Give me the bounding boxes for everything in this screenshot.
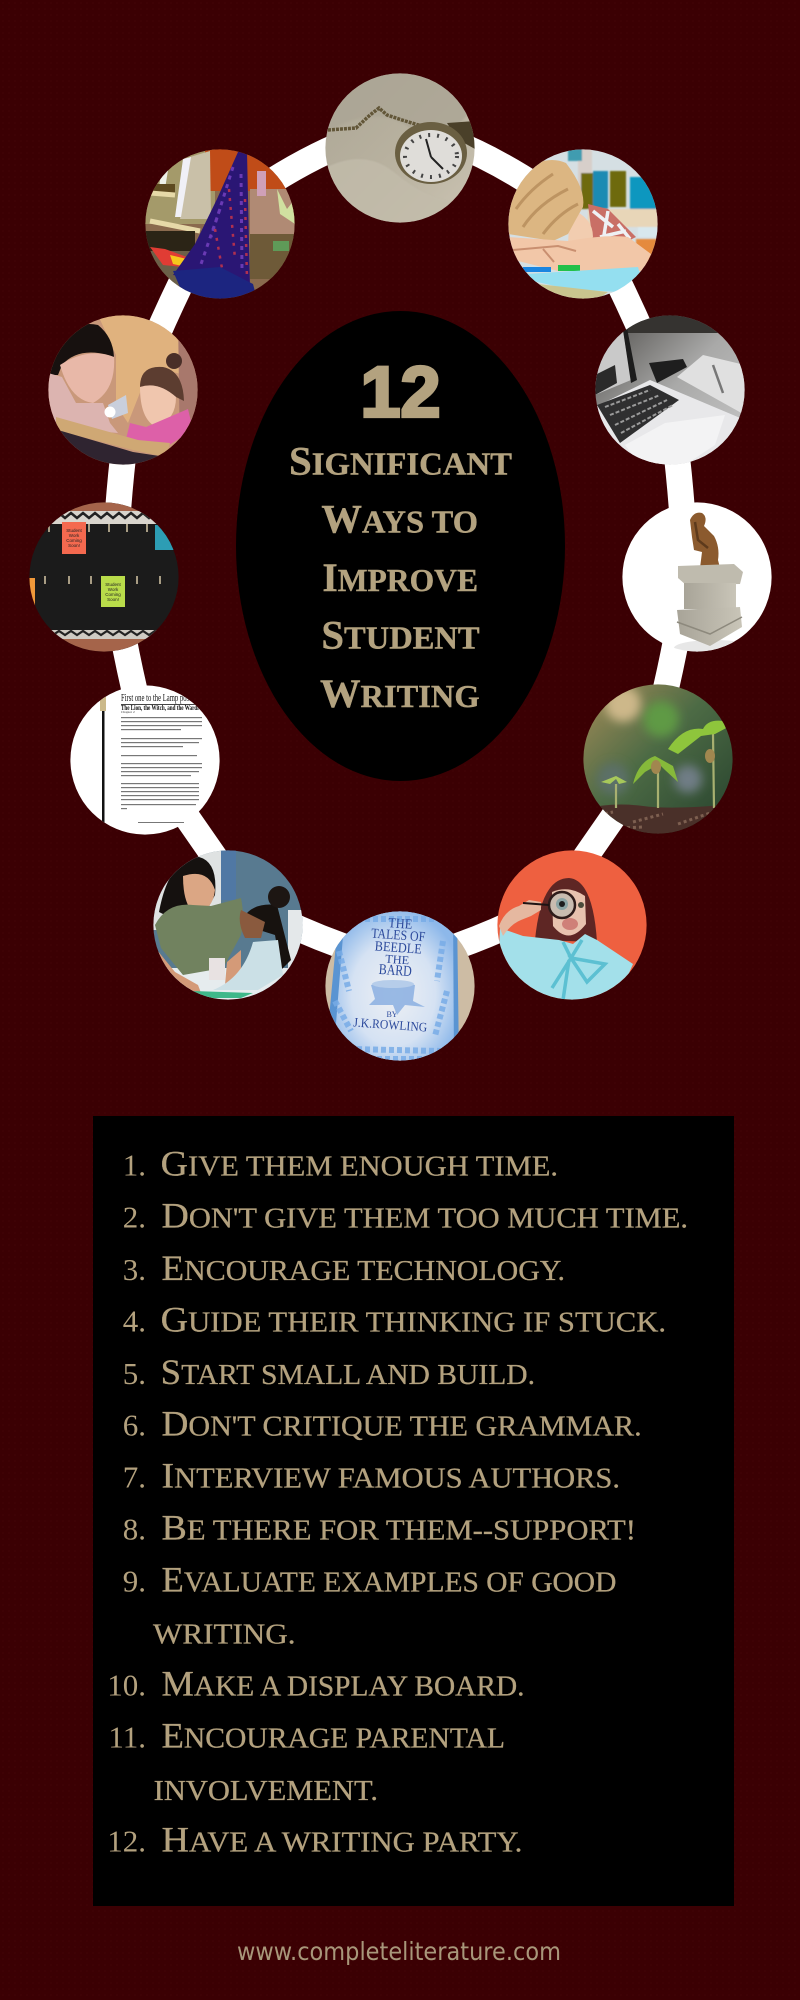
tip 9: EVALUATE EXAMPLES OF GOOD	[162, 1560, 616, 1600]
note: orange: Soon!	[68, 543, 80, 548]
tip 11: 11.	[108, 1720, 146, 1755]
photo: classroom display board	[29, 502, 179, 652]
note: green: Coming	[105, 592, 121, 597]
tip 4: GUIDE THEIR THINKING IF STUCK.	[161, 1300, 666, 1340]
tip 3: 3.	[123, 1252, 146, 1287]
tip 9: WRITING.	[153, 1619, 296, 1651]
tip 11: INVOLVEMENT.	[154, 1775, 378, 1807]
photo: The Tales of Beedle the Bard book cover	[325, 911, 475, 1061]
note: green: Student	[105, 582, 122, 587]
photo: The Tales of Beedle the Bard book cover: BEEDLE	[374, 939, 422, 958]
photo: The Tales of Beedle the Bard book cover: BY	[386, 1010, 398, 1019]
note: green	[101, 576, 125, 607]
note: green: Soon!	[107, 597, 119, 602]
title line: Improve: IMPROVE	[322, 555, 478, 600]
tip 7: 7.	[123, 1460, 146, 1495]
tip 11	[108, 1716, 505, 1807]
tip 9: 9.	[123, 1564, 146, 1599]
title oval	[236, 311, 565, 781]
tip 6: DON'T CRITIQUE THE GRAMMAR.	[162, 1404, 642, 1444]
note: blue	[155, 525, 174, 550]
photo: boy asleep on a desk	[508, 149, 658, 299]
title line: Significant: SIGNIFICANT	[289, 438, 512, 483]
page heading: First one to the Lamp post	[121, 693, 191, 704]
tip 7: INTERVIEW FAMOUS AUTHORS.	[162, 1456, 620, 1496]
panel: list of tips	[93, 1116, 734, 1906]
photo: pocket watch in sand	[325, 73, 475, 223]
tip 1: 1.	[123, 1148, 146, 1183]
tip 9	[123, 1560, 616, 1651]
title line: Student: STUDENT	[321, 613, 480, 658]
photo: The Tales of Beedle the Bard book cover: THE	[385, 952, 410, 967]
ring connecting the photos	[117, 141, 683, 952]
note: green: Work	[108, 587, 119, 592]
title line: Ways to: WAYS TO	[321, 497, 478, 542]
tip 10: 10.	[107, 1668, 146, 1703]
photo: printed reading worksheet page	[70, 685, 220, 835]
photo: woman with magnifying glass	[497, 850, 647, 1000]
tip 8: 8.	[123, 1511, 146, 1546]
party hat cone	[173, 152, 250, 287]
note: orange: Coming	[66, 538, 82, 543]
tip 2: DON'T GIVE THEM TOO MUCH TIME.	[162, 1196, 688, 1236]
title line: Writing: WRITING	[320, 671, 480, 716]
photo: The Tales of Beedle the Bard book cover: J.K.ROWLING	[353, 1014, 428, 1035]
tip 11: ENCOURAGE PARENTAL	[162, 1716, 505, 1756]
tip 5: 5.	[123, 1356, 146, 1391]
note: orange: Work	[69, 533, 80, 538]
photo: printed reading worksheet page: Chapter 2	[121, 710, 135, 714]
tip 3: ENCOURAGE TECHNOLOGY.	[162, 1248, 565, 1288]
tip 6: 6.	[123, 1408, 146, 1443]
book title: THE	[388, 916, 413, 933]
photo: seedlings growing from soil	[583, 684, 733, 834]
title number: 12	[360, 354, 440, 432]
note: orange: Student	[66, 528, 83, 533]
page subheading: The Lion, the Witch, and the Wardrobe	[121, 704, 207, 712]
photo: party hat on a table	[145, 149, 295, 299]
tip 5: START SMALL AND BUILD.	[161, 1352, 535, 1392]
title: 12 Significant Ways to Improve Student Writing	[289, 354, 512, 716]
photo: The Tales of Beedle the Bard book cover: BARD	[378, 962, 412, 980]
photo: thinker statue on a pedestal	[622, 502, 772, 656]
photo: The Tales of Beedle the Bard book cover: TALES OF	[371, 927, 426, 945]
footer website URL: www.completeliterature.com	[237, 1937, 561, 1966]
note: orange	[62, 522, 86, 554]
tip 12: 12.	[107, 1824, 146, 1859]
tip 12: HAVE A WRITING PARTY.	[162, 1820, 522, 1860]
tip 1: GIVE THEM ENOUGH TIME.	[161, 1144, 558, 1184]
tip 8: BE THERE FOR THEM--SUPPORT!	[162, 1507, 636, 1547]
lamp post	[102, 699, 104, 835]
photo: mother and daughter reading by flashlight	[48, 315, 198, 465]
photo: teacher helping a student	[153, 850, 303, 1000]
tip 2: 2.	[123, 1200, 146, 1235]
photo: laptop on a desk	[595, 315, 745, 465]
tip 10: MAKE A DISPLAY BOARD.	[162, 1664, 524, 1704]
tip 4: 4.	[123, 1304, 146, 1339]
